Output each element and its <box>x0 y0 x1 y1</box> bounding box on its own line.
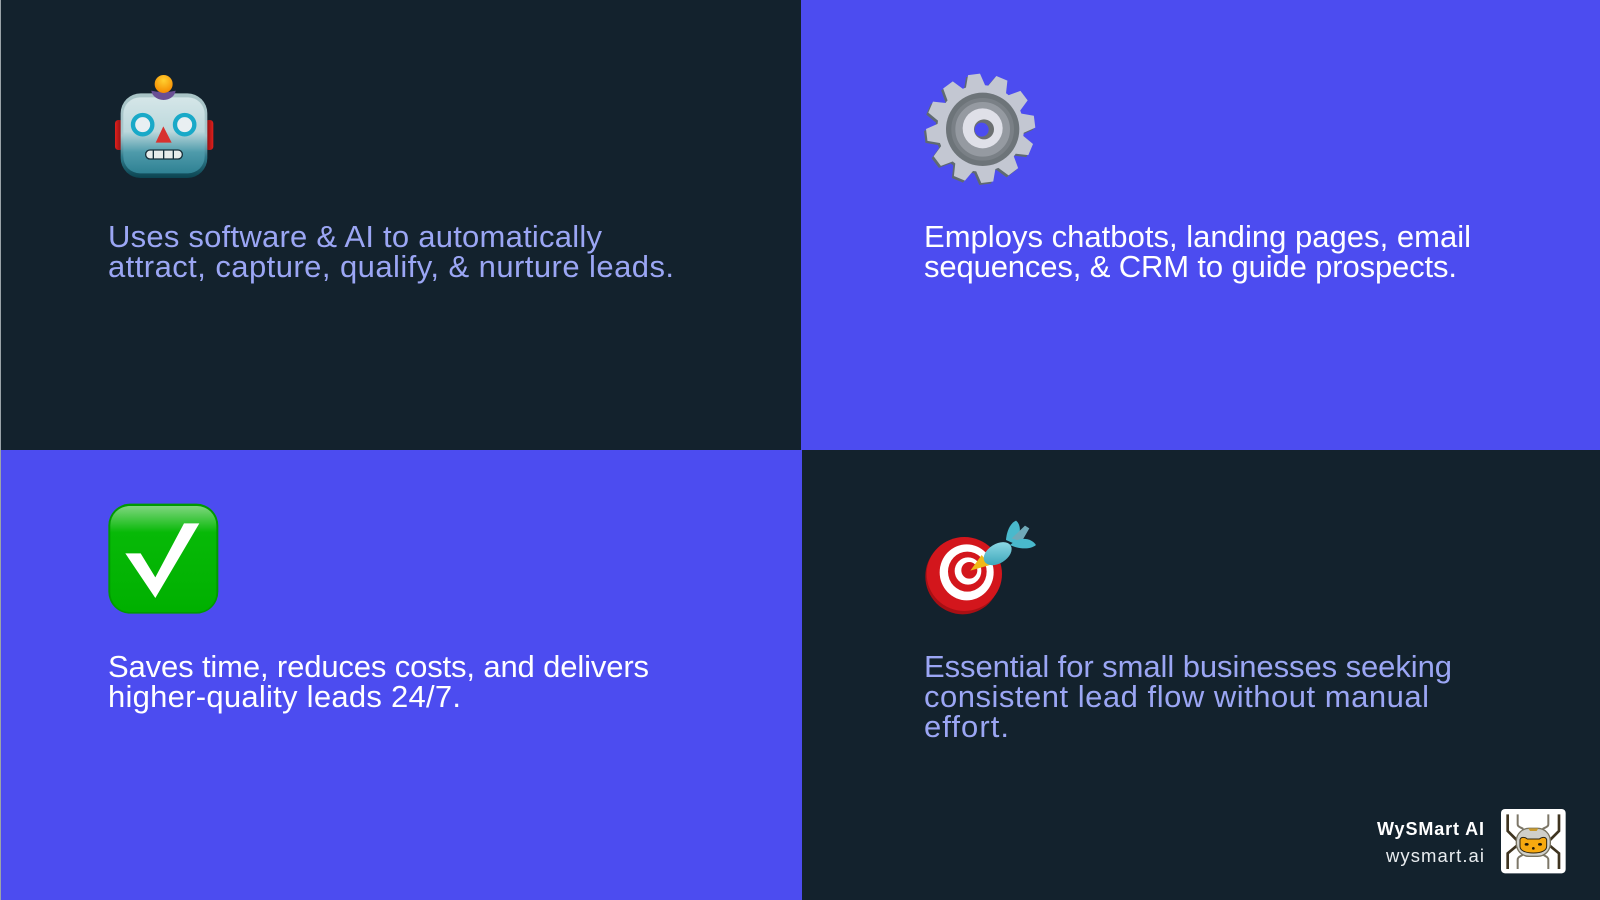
panel: top right background <box>801 0 1600 450</box>
text: audience <box>924 649 1452 744</box>
icon: check mark <box>108 504 218 614</box>
text: benefits: Saves time, reduces costs, and delivers <box>108 649 649 684</box>
icon: robot <box>115 75 213 178</box>
footer: brand <box>1377 809 1566 873</box>
panel: bottom right background <box>802 450 1600 900</box>
text: benefits <box>108 649 649 714</box>
icon: gear <box>918 68 1041 191</box>
text: audience: consistent lead flow without manual <box>924 679 1429 714</box>
panel: audience <box>924 521 1452 744</box>
brand name: WySMart AI <box>1377 819 1484 839</box>
text: benefits: higher-quality leads 24/7. <box>108 679 461 714</box>
text: audience: effort. <box>924 709 1009 744</box>
text: automation definition <box>108 219 674 284</box>
brand url: wysmart.ai <box>1385 845 1484 866</box>
text: tools used: Employs chatbots, landing pages, email <box>924 219 1471 254</box>
text: automation definition: Uses software & AI to automatically <box>108 219 602 254</box>
panel: top left background <box>0 0 801 450</box>
icon: target with dart <box>925 521 1036 614</box>
panel: automation definition <box>108 75 674 284</box>
text: audience: Essential for small businesses seeking <box>924 649 1452 684</box>
text: automation definition: attract, capture, qualify, & nurture leads. <box>108 249 674 284</box>
icon: logo <box>1501 809 1566 873</box>
panel: benefits <box>108 504 649 714</box>
text: tools used: sequences, & CRM to guide prospects. <box>924 249 1457 284</box>
panel: tools used <box>918 68 1471 284</box>
text: tools used <box>924 219 1471 284</box>
panel: bottom left background <box>0 450 802 900</box>
